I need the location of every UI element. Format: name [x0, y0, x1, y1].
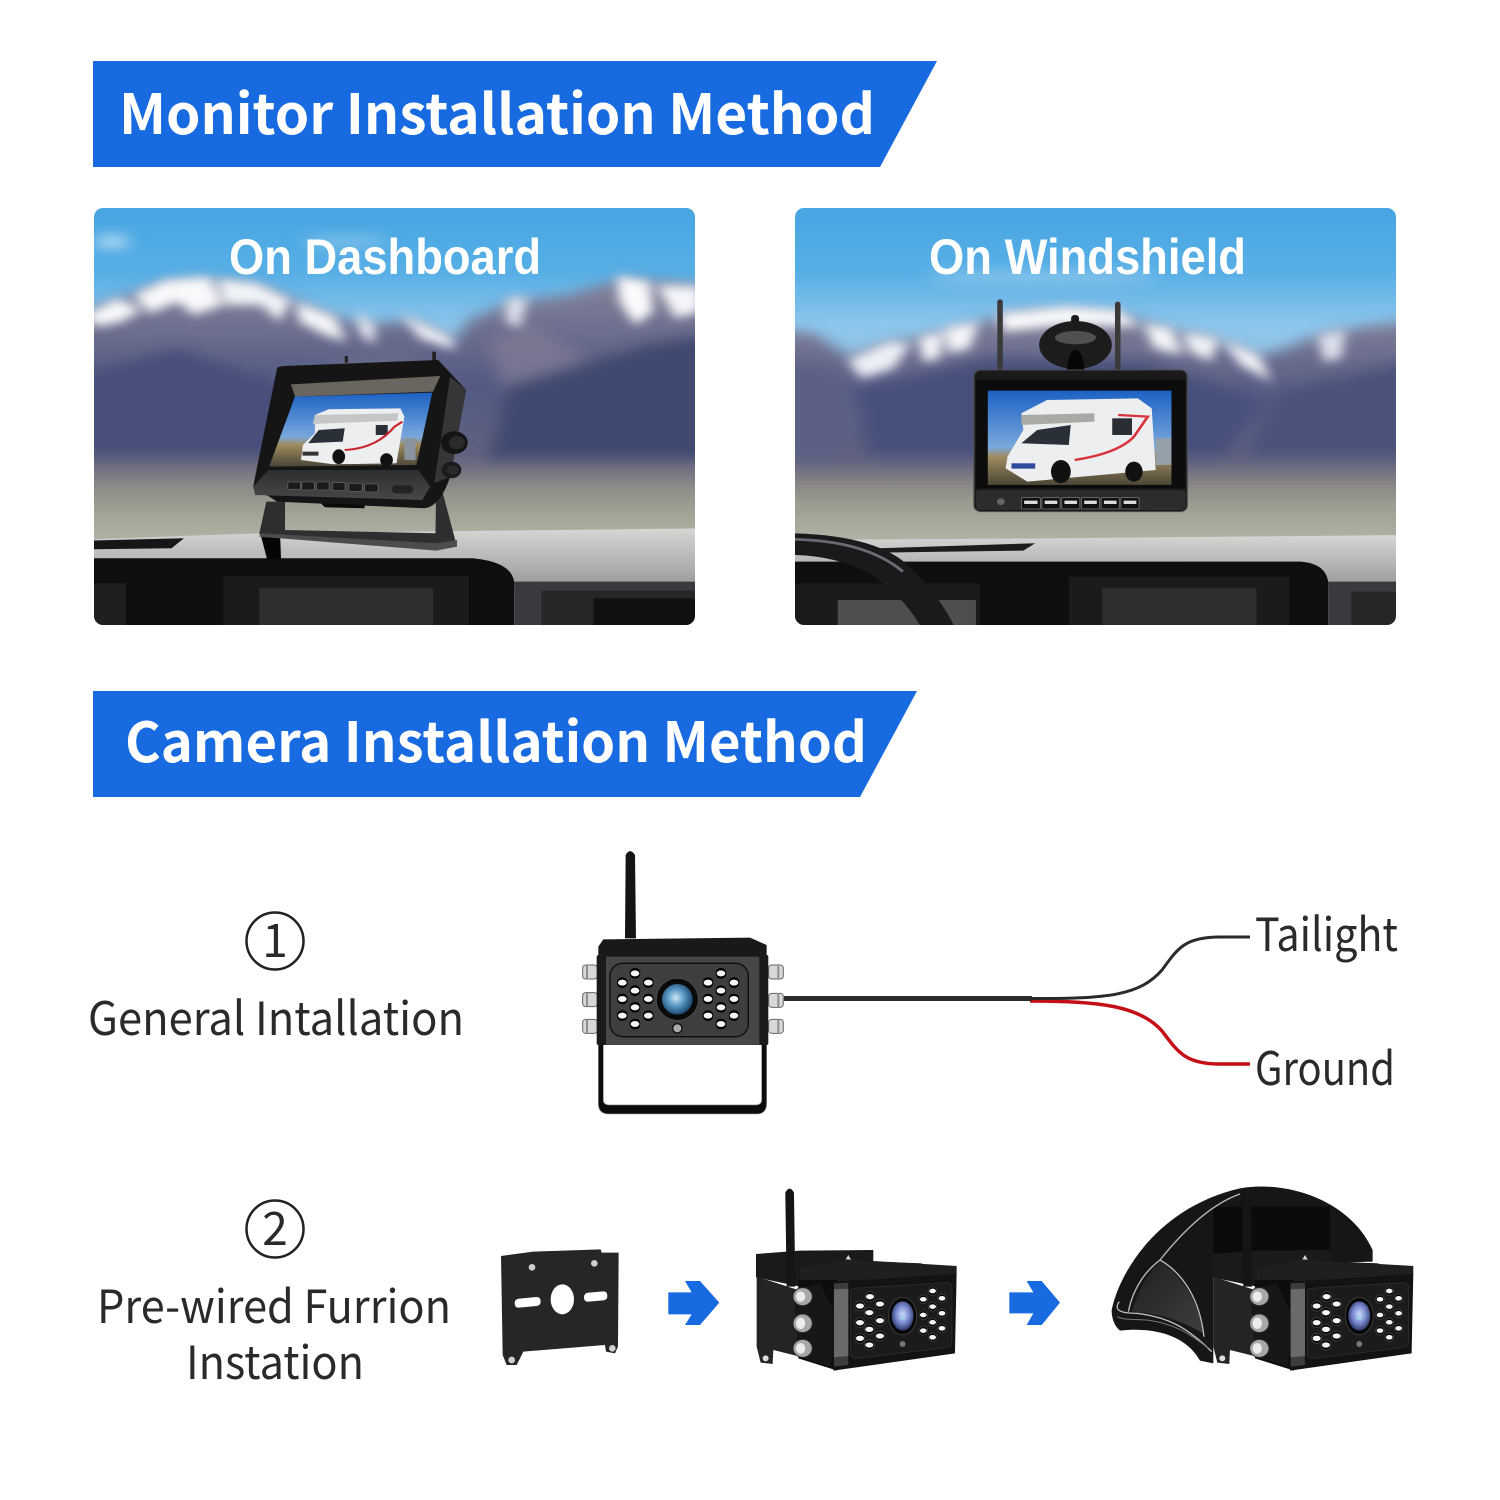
label: Ground: Ground [1255, 1033, 1395, 1099]
label: Tailight: Tailight [1255, 899, 1398, 965]
icon: camera on plate [756, 1189, 957, 1371]
label: Pre-wired Furrion Instation: Instation [186, 1327, 364, 1393]
step 2 number: 2 [262, 1193, 288, 1259]
icon: mounting plate [501, 1249, 619, 1365]
arrow [1009, 1281, 1060, 1325]
label: Pre-wired Furrion Instation: Pre-wired Furrion [97, 1271, 451, 1337]
step 1 number [246, 905, 304, 971]
step 1 number: 1 [262, 905, 288, 971]
dashboard and steering wheel [790, 533, 1407, 630]
dashboard [90, 528, 713, 630]
label: On Dashboard: On Dashboard [229, 229, 541, 285]
RV on screen [301, 408, 416, 467]
header banner: monitor installation [93, 61, 937, 167]
step 2 number [246, 1193, 304, 1259]
icon: camera front view [583, 851, 783, 1114]
panel: on windshield [795, 208, 1396, 625]
monitor with suction mount [974, 299, 1187, 512]
label: On Windshield: On Windshield [929, 229, 1246, 285]
monitor with sunshade on bracket [253, 352, 468, 551]
wiring diagram [784, 937, 1250, 1064]
blurred background scene [74, 200, 727, 567]
arrow [668, 1281, 719, 1325]
panel: on dashboard [94, 208, 695, 625]
icon: camera with Furrion dome mount [1112, 1186, 1413, 1371]
label: General Intallation: General Intallation [88, 983, 464, 1049]
header banner: camera installation [93, 691, 917, 797]
blurred background scene [795, 208, 1396, 540]
RV on screen [1006, 398, 1171, 483]
label: Pre-wired Furrion Instation [97, 1271, 451, 1393]
heading: Monitor Installation Method: Monitor Installation Method [119, 70, 875, 150]
heading: Camera Installation Method: Camera Installation Method [125, 698, 867, 778]
